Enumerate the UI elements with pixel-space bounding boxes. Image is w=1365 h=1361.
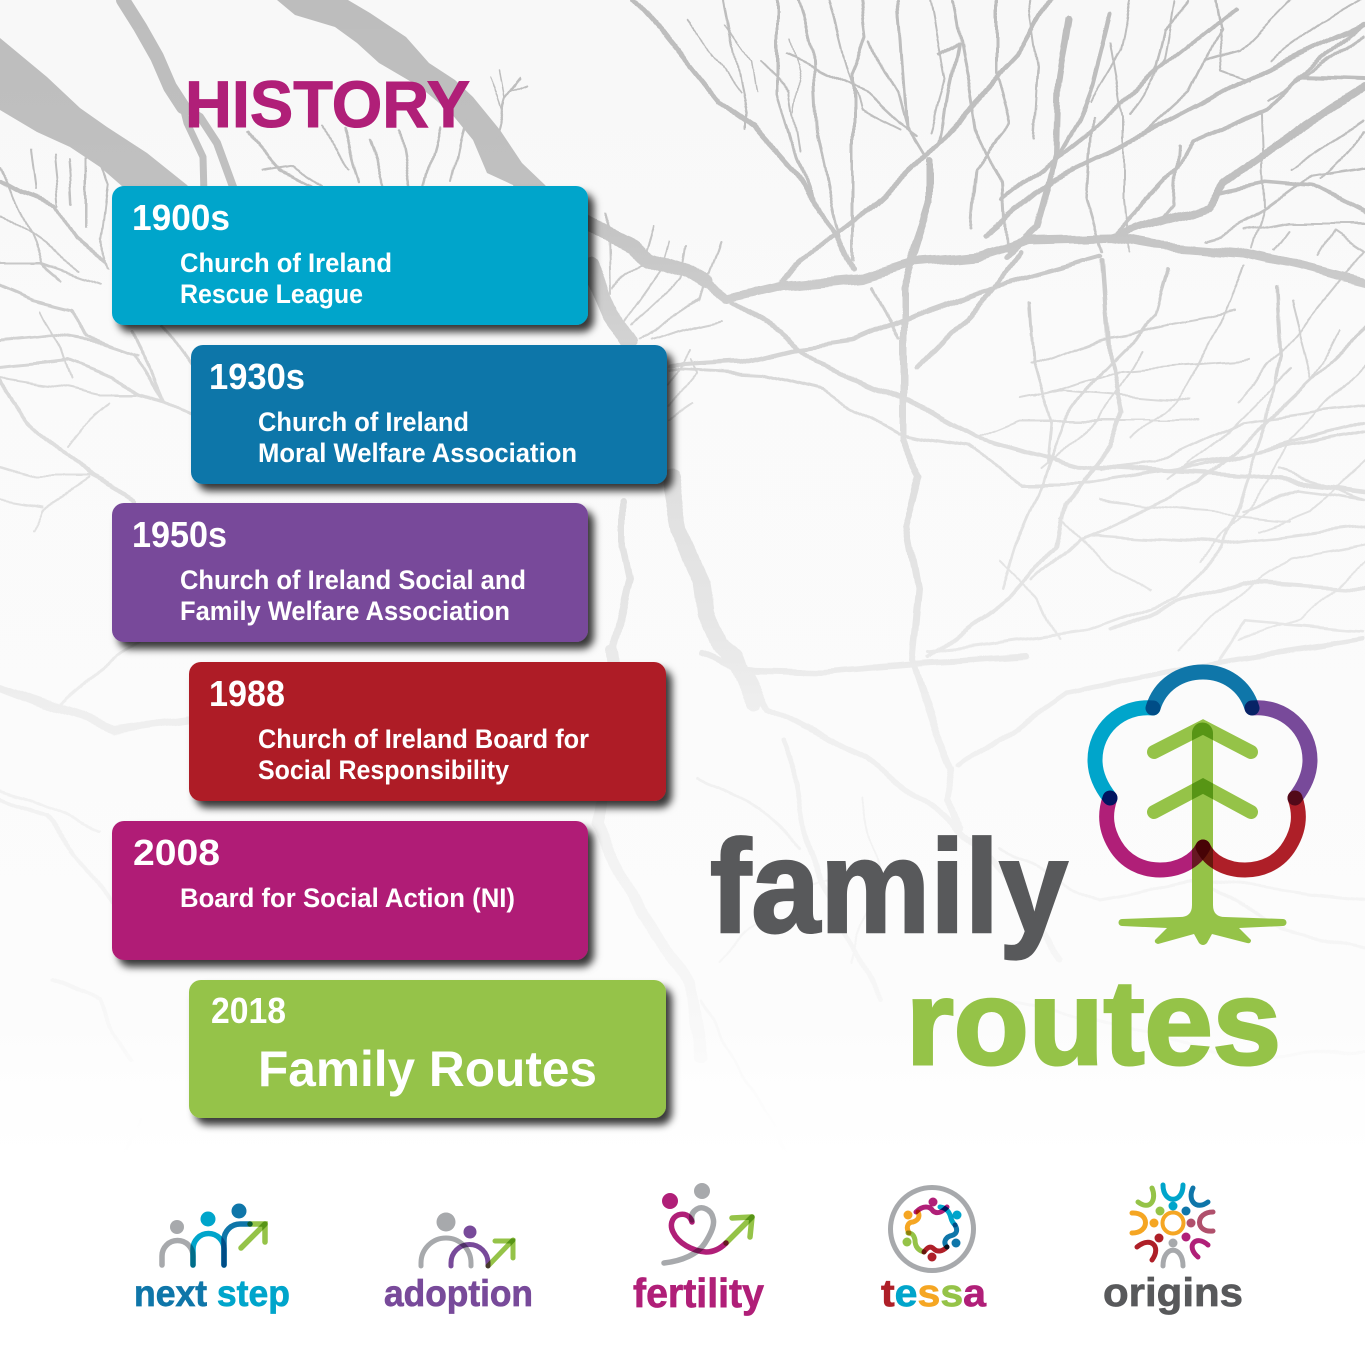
wordmark: family: family <box>710 813 1068 960</box>
logo: next step <box>134 1204 290 1314</box>
wordmark: routes: routes <box>906 956 1281 1090</box>
logo: origins <box>1103 1185 1243 1315</box>
card: 1900s <box>112 186 588 325</box>
title: HISTORY <box>185 67 470 141</box>
logo: adoption <box>384 1212 533 1314</box>
logo: fertility <box>633 1183 764 1316</box>
card: 1988: 1988 <box>209 673 285 714</box>
card: 1900s: Church of Ireland <box>180 248 392 278</box>
card: 1988: Church of Ireland Board for <box>258 724 589 754</box>
icon: tree <box>1095 672 1310 945</box>
card: 2008: 2008 <box>133 832 220 873</box>
logo: next step: next step <box>134 1273 290 1314</box>
card: 1900s: 1900s <box>132 197 230 238</box>
card: 1950s <box>112 503 588 642</box>
card: 1900s: Rescue League <box>180 279 363 309</box>
card: 1988 <box>189 662 666 801</box>
logo: family routes <box>710 672 1310 1090</box>
card: 1988: Social Responsibility <box>258 755 509 785</box>
logo row: services <box>134 1183 1243 1316</box>
card: 1930s <box>191 345 667 484</box>
logo: tessa: tessa <box>881 1273 987 1315</box>
card: 1950s: 1950s <box>132 514 227 555</box>
logo: fertility: fertility <box>633 1270 764 1316</box>
card: 1950s: Family Welfare Association <box>180 596 510 626</box>
panel: timeline cards <box>112 186 667 1118</box>
logo: adoption: adoption <box>384 1273 533 1314</box>
card: 2008 <box>112 821 588 960</box>
logo: origins: origins <box>1103 1271 1243 1315</box>
card: 2018: 2018 <box>211 990 286 1031</box>
card: 1930s: Church of Ireland <box>258 407 469 437</box>
card: 1930s: Moral Welfare Association <box>258 438 577 468</box>
card: 1930s: 1930s <box>209 356 305 397</box>
card: 2018 <box>189 980 666 1118</box>
card: 1950s: Church of Ireland Social and <box>180 565 526 595</box>
logo: tessa <box>881 1188 987 1315</box>
card: 2008: Board for Social Action (NI) <box>180 883 515 913</box>
card: 2018: Family Routes <box>258 1041 597 1097</box>
